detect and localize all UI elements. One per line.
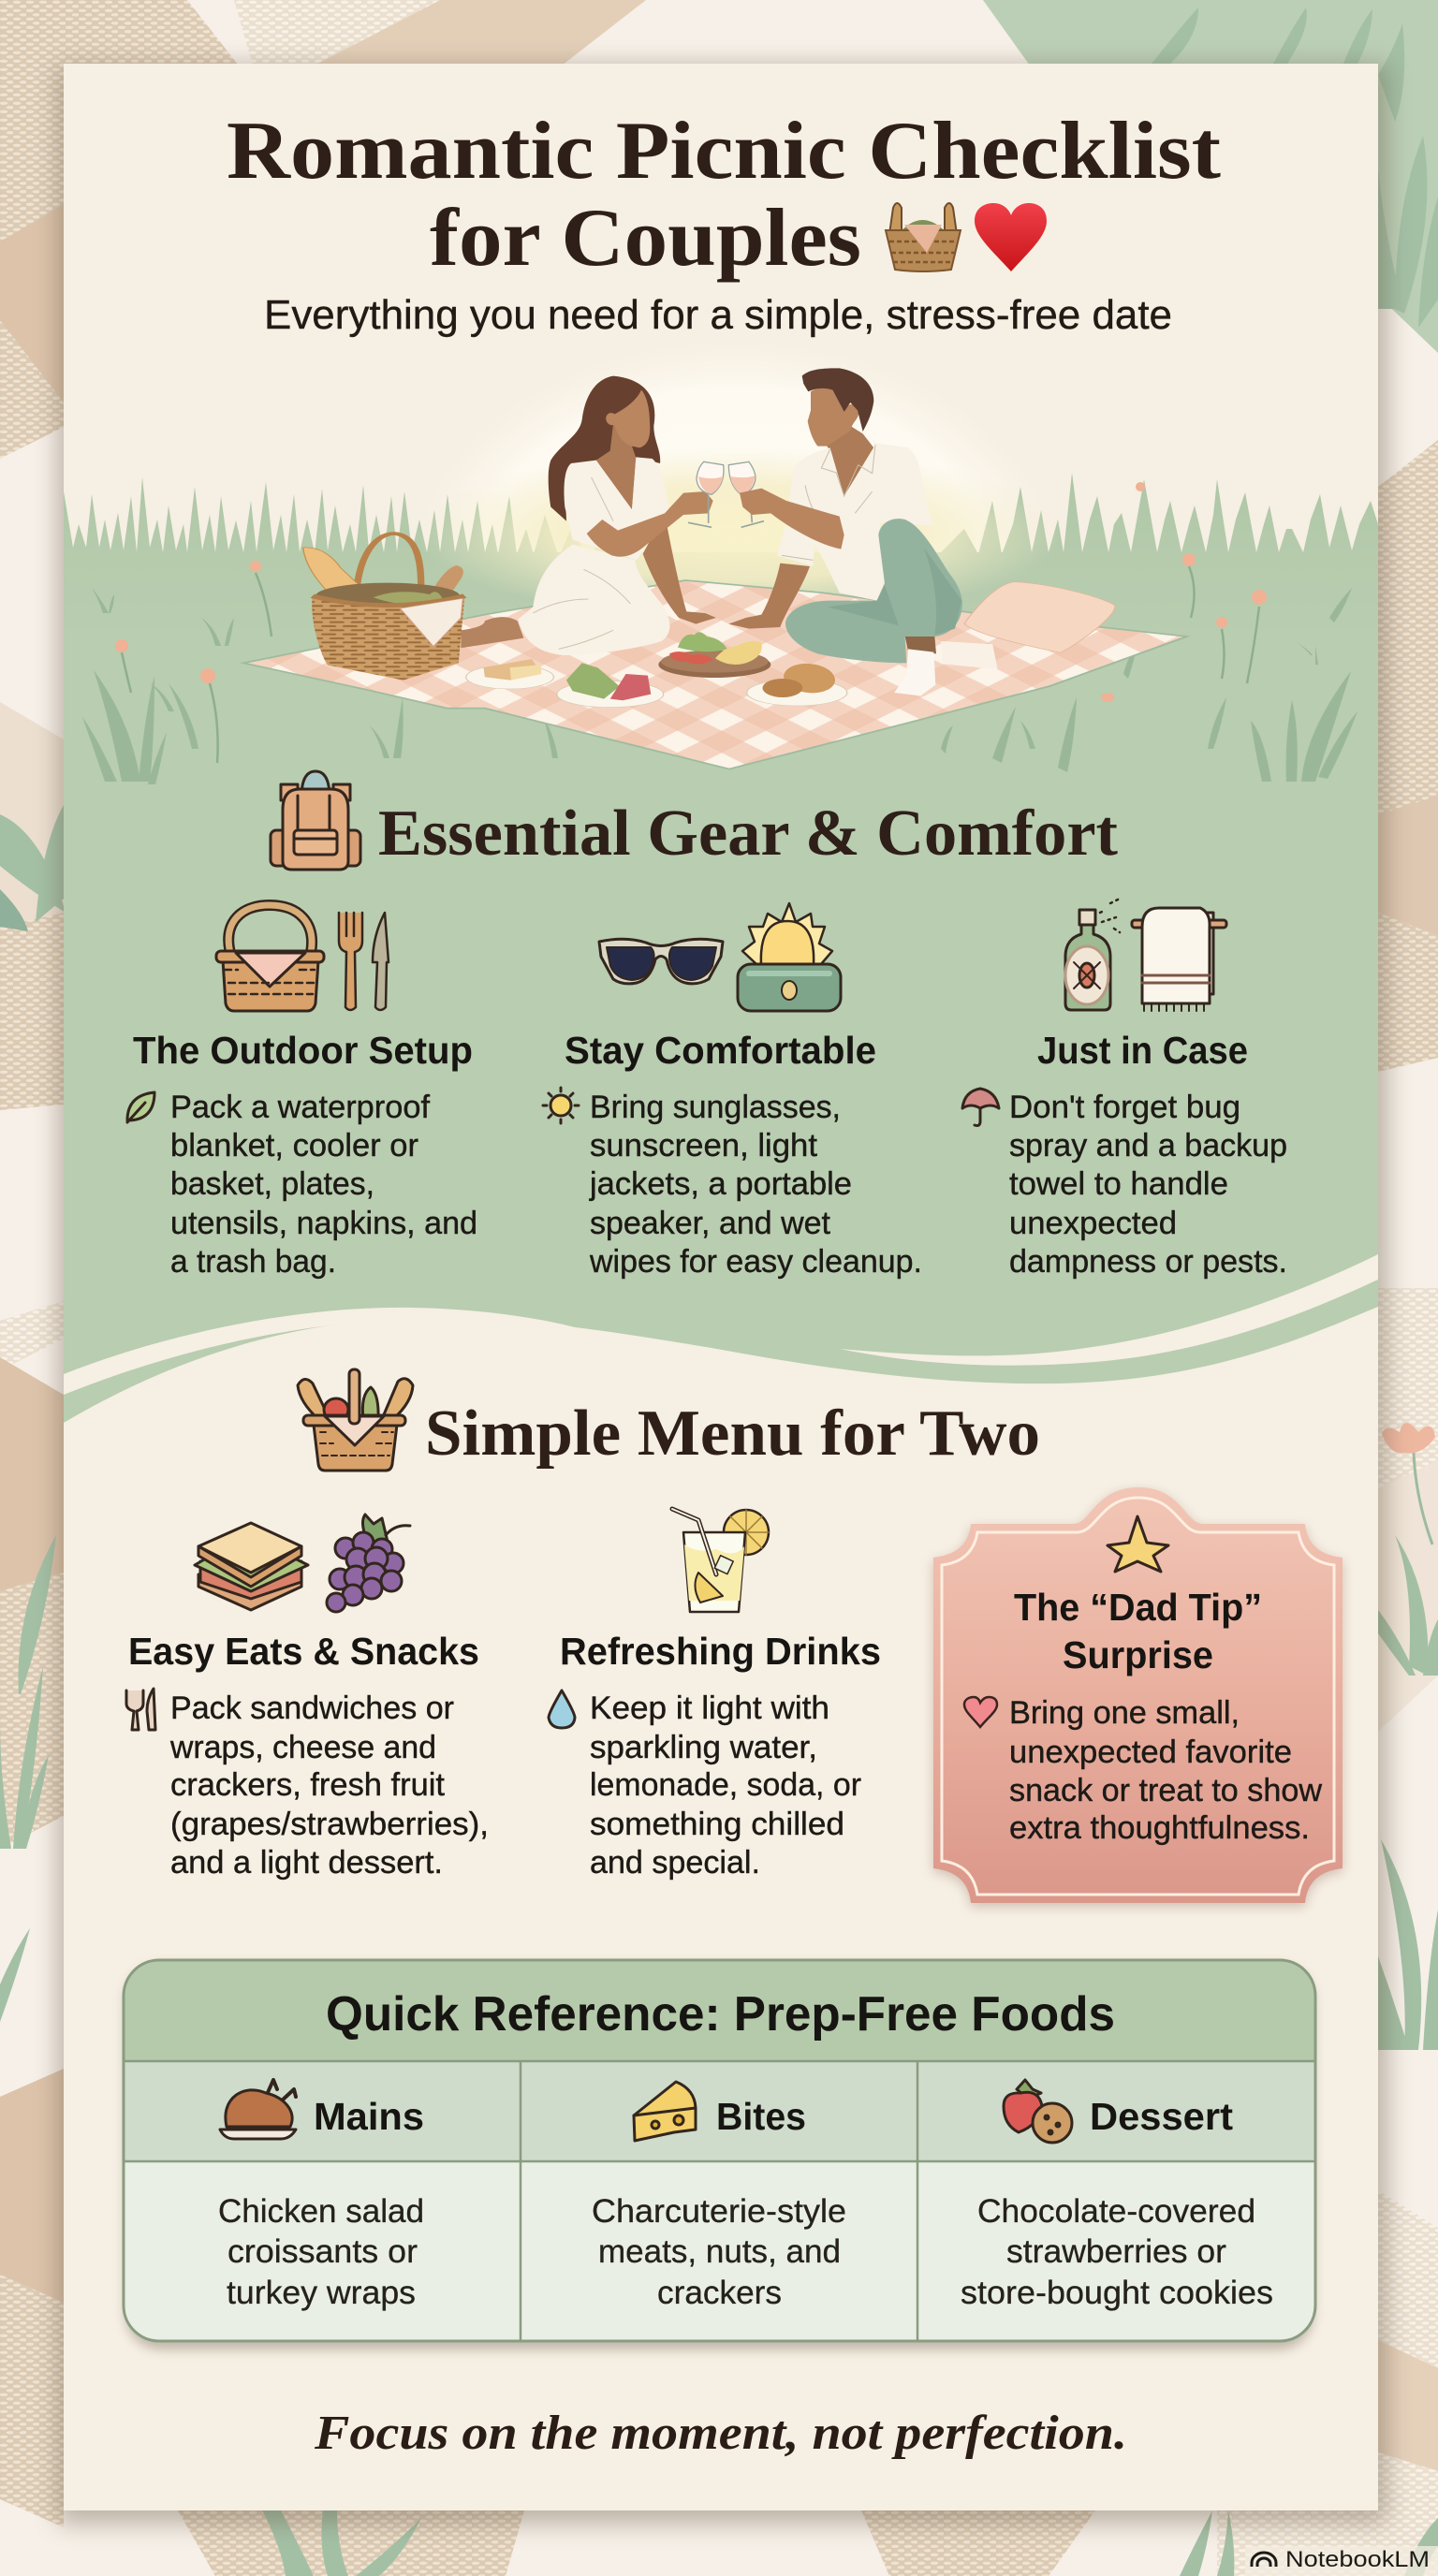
subtitle: Everything you need for a simple, stress-free date: [264, 292, 1172, 338]
item: easy eats and snacks: [126, 1515, 489, 1881]
man ankle: [905, 637, 936, 653]
footer tagline: Focus on the moment, not perfection.: [314, 2407, 1127, 2460]
text: easy eats body: wraps, cheese and: [169, 1730, 436, 1765]
plate: greens and berries: [557, 663, 664, 708]
item: just in case: [962, 899, 1287, 1280]
illustration: blanket, basket and picnic, drawn in a scaled local space: [243, 534, 1187, 769]
section: simple menu for two: [126, 1369, 1343, 1907]
heading: just in case: Just in Case: [1037, 1029, 1248, 1072]
heading: refreshing drinks: Refreshing Drinks: [560, 1630, 881, 1673]
icon: strawberry and cookie: [1004, 2080, 1072, 2143]
text: stay comfortable body: Bring sunglasses,: [590, 1090, 841, 1125]
item: stay comfortable: [543, 903, 922, 1280]
man front arm: [740, 489, 844, 549]
man hair: [802, 368, 873, 432]
heading: the outdoor setup: The Outdoor Setup: [133, 1029, 473, 1072]
wine glass right: [728, 461, 764, 527]
man sock: [894, 649, 935, 695]
heading: dad tip: The “Dad Tip”: [1014, 1586, 1262, 1629]
fruit platter: [658, 632, 770, 678]
icon: grapes: [327, 1515, 410, 1612]
text: dad tip body: extra thoughtfulness.: [1009, 1810, 1310, 1846]
picnic basket: [303, 534, 464, 681]
woman neck and chest: [596, 424, 636, 509]
text: bites cell: meats, nuts, and: [598, 2233, 841, 2270]
woman dress skirt: [518, 545, 669, 655]
callout: dad tip card: [933, 1487, 1343, 1907]
label: mains: Mains: [314, 2095, 424, 2138]
text: just in case body: Don't forget bug: [1009, 1090, 1240, 1125]
trouser shading: [827, 548, 961, 635]
man rear arm: [728, 564, 810, 629]
text: dad tip body: [1009, 1695, 1322, 1846]
heading: dad tip: Surprise: [1063, 1633, 1213, 1676]
sun glow dome: [479, 373, 985, 551]
heading: essential gear: Essential Gear & Comfort: [378, 798, 1118, 870]
title: Romantic Picnic Checklist: [227, 106, 1221, 197]
text: dessert cell: Chocolate-covered: [977, 2193, 1255, 2230]
badge: NotebookLM: NotebookLM: [1285, 2547, 1430, 2572]
section: essential gear and comfort: [127, 771, 1287, 1280]
text: dessert cell: [961, 2193, 1273, 2311]
icon: sandwich: [195, 1523, 308, 1610]
woman bodice: [564, 457, 669, 560]
wave: cream crescent left: [64, 1308, 585, 1395]
woman foot: [461, 617, 523, 648]
column: dessert: [961, 2080, 1273, 2311]
text: stay comfortable body: [589, 1090, 922, 1280]
text: bites cell: [592, 2193, 846, 2311]
text: easy eats body: Pack sandwiches or: [170, 1690, 454, 1726]
icon: umbrella: [962, 1089, 999, 1125]
item: refreshing drinks: [549, 1509, 881, 1881]
icon: cheese: [634, 2082, 696, 2141]
text: stay comfortable body: sunscreen, light: [590, 1128, 818, 1164]
icon: water drop: [549, 1690, 575, 1728]
wine glass left: [688, 461, 724, 527]
icon: towel: [1132, 908, 1226, 1011]
heading: quick reference: Quick Reference: Prep-Free Foods: [326, 1987, 1115, 2042]
text: just in case body: [1009, 1090, 1287, 1280]
text: mains cell: Chicken salad: [218, 2193, 424, 2230]
text: easy eats body: crackers, fresh fruit: [170, 1767, 446, 1803]
icon: sunglasses: [599, 939, 723, 984]
text: just in case body: spray and a backup: [1009, 1128, 1287, 1164]
illustration: couple, drawn in a 3x local space: [518, 368, 962, 695]
text: easy eats body: [169, 1690, 489, 1881]
table: quick reference: [124, 1960, 1315, 2341]
bodice fold line: [592, 477, 613, 521]
text: refreshing drinks body: something chilled: [590, 1807, 844, 1842]
picnic blanket: [243, 580, 1187, 769]
text: just in case body: unexpected: [1009, 1206, 1177, 1241]
text: outdoor setup body: Pack a waterproof: [170, 1090, 431, 1125]
text: dad tip body: unexpected favorite: [1009, 1734, 1292, 1770]
woman rear arm: [642, 528, 716, 624]
text: easy eats body: and a light dessert.: [170, 1845, 443, 1881]
man trousers: [785, 519, 962, 663]
text: refreshing drinks body: sparkling water,: [590, 1730, 817, 1765]
icon: basket emoji: [886, 203, 961, 271]
text: stay comfortable body: speaker, and wet: [590, 1206, 831, 1241]
woman front arm: [587, 491, 713, 557]
horizon glow: [442, 456, 1041, 596]
dress fold lines: [533, 569, 630, 649]
icon: small sun: [543, 1088, 579, 1123]
column: mains: [218, 2080, 424, 2311]
table shadow: [125, 1966, 1313, 2349]
icon: heart emoji: [975, 203, 1047, 271]
plate: sandwich: [466, 659, 553, 689]
woman face: [606, 390, 650, 447]
text: stay comfortable body: jackets, a portable: [589, 1166, 852, 1202]
label: dessert: Dessert: [1090, 2095, 1233, 2138]
text: bites cell: crackers: [657, 2275, 782, 2311]
text: easy eats body: (grapes/strawberries),: [170, 1807, 489, 1842]
hero illustration panel: [64, 337, 1378, 1423]
heading: simple menu: Simple Menu for Two: [425, 1398, 1040, 1470]
heading: stay comfortable: Stay Comfortable: [565, 1029, 876, 1072]
text: outdoor setup body: blanket, cooler or: [170, 1128, 418, 1164]
text: just in case body: dampness or pests.: [1009, 1244, 1287, 1280]
text: refreshing drinks body: and special.: [590, 1845, 760, 1881]
text: mains cell: [218, 2193, 424, 2311]
item: the outdoor setup: [127, 905, 477, 1280]
text: dad tip body: Bring one small,: [1009, 1695, 1240, 1731]
text: dessert cell: strawberries or: [1006, 2233, 1226, 2270]
icon: food basket: [298, 1369, 413, 1471]
man neck: [827, 426, 873, 496]
column: bites: [592, 2082, 846, 2311]
text: outdoor setup body: [170, 1090, 477, 1280]
woman hair: [549, 376, 660, 521]
grass horizon: [64, 473, 1378, 1423]
text: dad tip body: snack or treat to show: [1009, 1773, 1322, 1808]
label: bites: Bites: [716, 2095, 806, 2138]
icon: heart: [964, 1697, 997, 1727]
text: outdoor setup body: utensils, napkins, and: [170, 1206, 477, 1241]
wave: cream crescent right: [840, 1254, 1378, 1366]
text: refreshing drinks body: lemonade, soda, or: [590, 1767, 861, 1803]
text: refreshing drinks body: Keep it light with: [590, 1690, 829, 1726]
man face: [808, 388, 858, 446]
cloth napkin: [941, 641, 998, 669]
icon: leaf: [127, 1092, 154, 1122]
text: refreshing drinks body: [590, 1690, 861, 1881]
text: stay comfortable body: wipes for easy cleanup.: [589, 1244, 922, 1280]
text: outdoor setup body: basket, plates,: [170, 1166, 374, 1202]
flower on blanket margin: [1382, 1423, 1435, 1544]
icon: sun and speaker: [738, 903, 841, 1011]
text: mains cell: croissants or: [227, 2233, 418, 2270]
heading: easy eats: Easy Eats & Snacks: [128, 1630, 479, 1673]
icon: lemonade: [672, 1509, 769, 1612]
text: outdoor setup body: a trash bag.: [170, 1244, 336, 1280]
text: dessert cell: store-bought cookies: [961, 2275, 1273, 2311]
plate: cookies: [747, 660, 847, 706]
icon: star: [1108, 1516, 1168, 1572]
pillow: [964, 582, 1115, 652]
text: mains cell: turkey wraps: [227, 2275, 416, 2311]
man shirt: [777, 433, 933, 601]
icon: roast chicken: [220, 2080, 296, 2139]
meadow tufts and flowers: [82, 588, 1357, 784]
heading: dad tip: [1014, 1586, 1262, 1676]
icon: fork and knife: [126, 1689, 155, 1730]
text: bites cell: Charcuterie-style: [592, 2193, 846, 2230]
shirt detail lines: [782, 445, 875, 560]
icon: basket and utensils: [216, 905, 389, 1011]
badge: NotebookLM: [1245, 2546, 1438, 2576]
icon: backpack: [271, 771, 360, 870]
title: for Couples: [430, 193, 861, 284]
title: [227, 106, 1221, 284]
icon: bug spray: [1065, 899, 1120, 1010]
text: just in case body: towel to handle: [1009, 1166, 1228, 1202]
